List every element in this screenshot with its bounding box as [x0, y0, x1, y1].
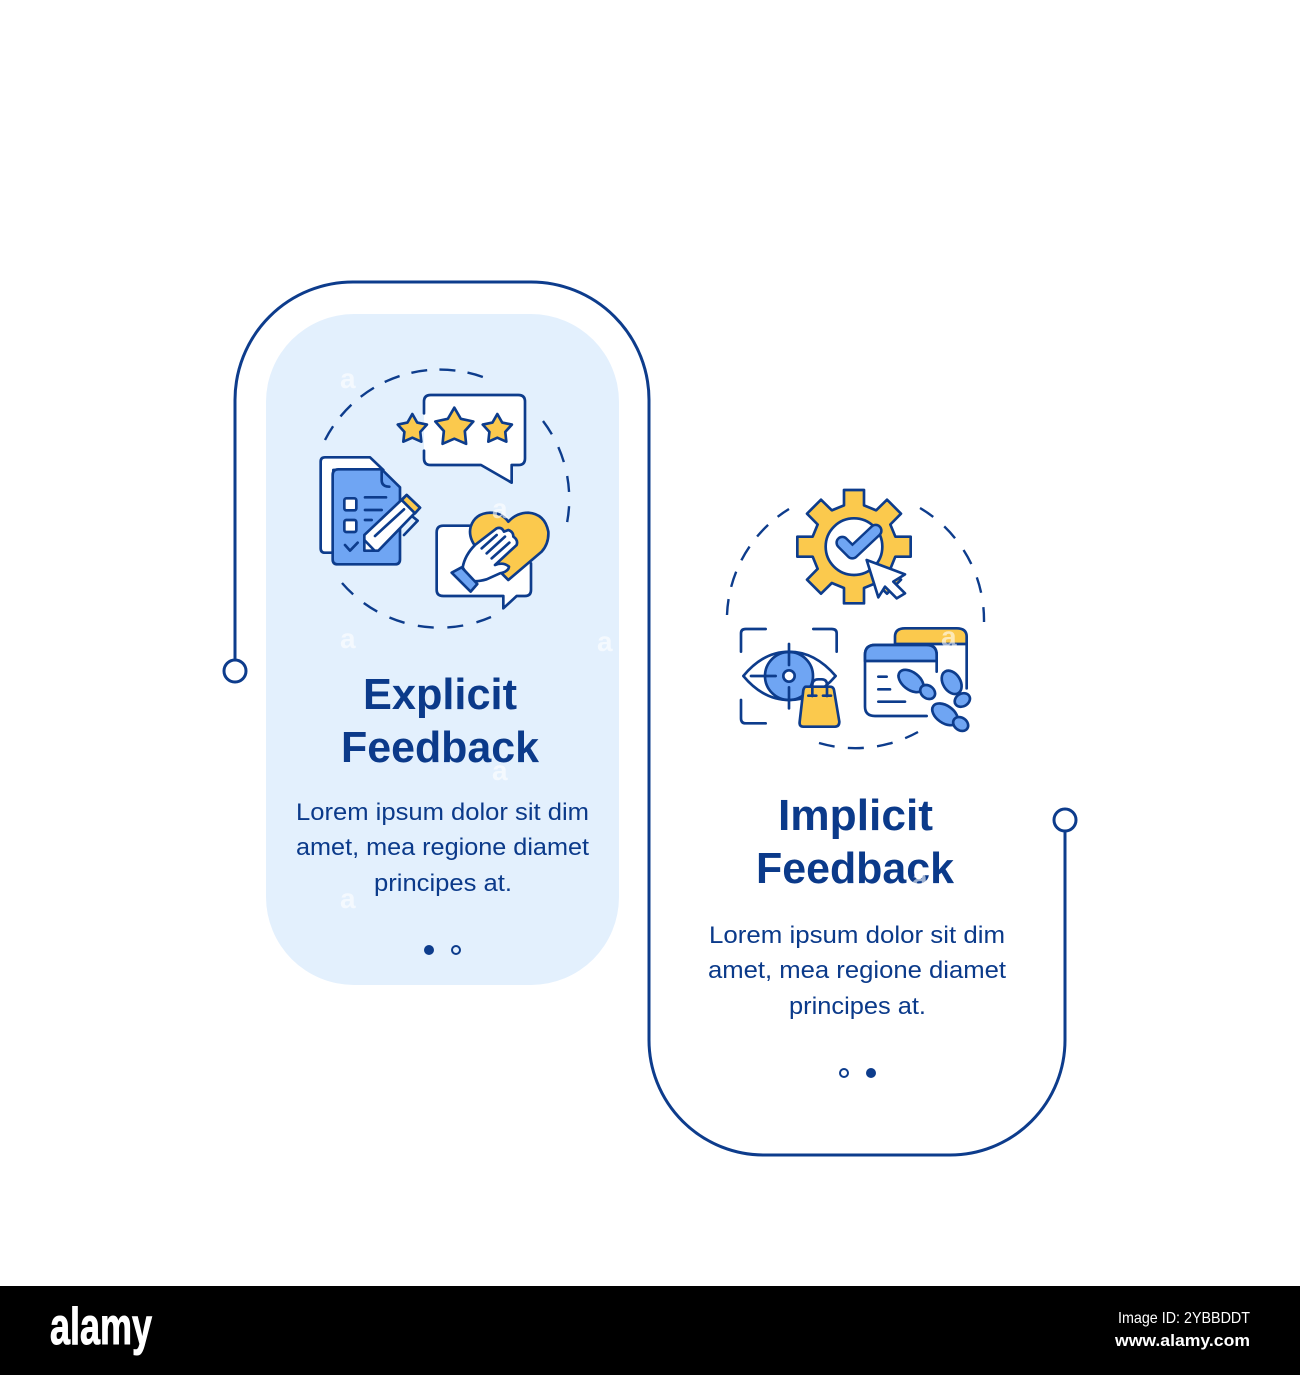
- heading: implicit feedback: [756, 791, 955, 893]
- icon: checklist document with pencil: [321, 457, 420, 564]
- stock watermarks: a: [941, 621, 957, 652]
- icon: gear with check and cursor: [797, 490, 911, 603]
- stock watermarks: a: [340, 883, 356, 914]
- pagination dots: implicit: [840, 1068, 876, 1078]
- icon: hand on heart in speech bubble: [437, 513, 548, 608]
- icon: browser windows with footprints: [865, 628, 972, 734]
- icon group: implicit feedback: [727, 490, 984, 748]
- footer url: www.alamy.com: [1114, 1331, 1250, 1350]
- heading: implicit feedback: Implicit: [778, 791, 933, 840]
- text block: explicit description: Lorem ipsum dolor sit dim: [296, 799, 589, 826]
- icon: rating bubble with stars: [398, 395, 525, 483]
- icon group: explicit feedback: [321, 370, 569, 628]
- stock watermarks: [340, 363, 957, 914]
- icon: eye tracking with shopping bag: [741, 629, 839, 727]
- footer bar: [0, 1286, 1300, 1375]
- stock watermarks: a: [492, 755, 508, 786]
- heading: implicit feedback: Feedback: [756, 844, 955, 893]
- text block: implicit description: Lorem ipsum dolor sit dim: [709, 922, 1005, 949]
- text block: implicit description: amet, mea regione diamet: [708, 957, 1006, 984]
- stock watermarks: a: [597, 626, 613, 657]
- dashed ring: explicit: [325, 370, 569, 628]
- stock watermarks: a: [340, 623, 356, 654]
- text block: implicit description: principes at.: [789, 993, 926, 1020]
- stock watermarks: a: [492, 493, 508, 524]
- panel: explicit feedback background: [266, 314, 619, 985]
- heading: explicit feedback: Feedback: [341, 723, 540, 772]
- footer logo: alamy: [50, 1298, 152, 1356]
- pagination dots: explicit: [424, 945, 460, 955]
- dashed ring: implicit: [727, 508, 984, 748]
- heading: explicit feedback: [341, 670, 540, 772]
- text block: explicit description: amet, mea regione diamet: [296, 834, 589, 861]
- footer image id: Image ID: 2YBBDDT: [1118, 1310, 1250, 1327]
- connecting outline: [224, 282, 1076, 1155]
- stock watermarks: a: [912, 863, 928, 894]
- heading: explicit feedback: Explicit: [363, 670, 517, 719]
- stock watermarks: a: [340, 363, 356, 394]
- text block: implicit description: [708, 922, 1006, 1020]
- text block: explicit description: principes at.: [374, 870, 512, 897]
- text block: explicit description: [296, 799, 589, 897]
